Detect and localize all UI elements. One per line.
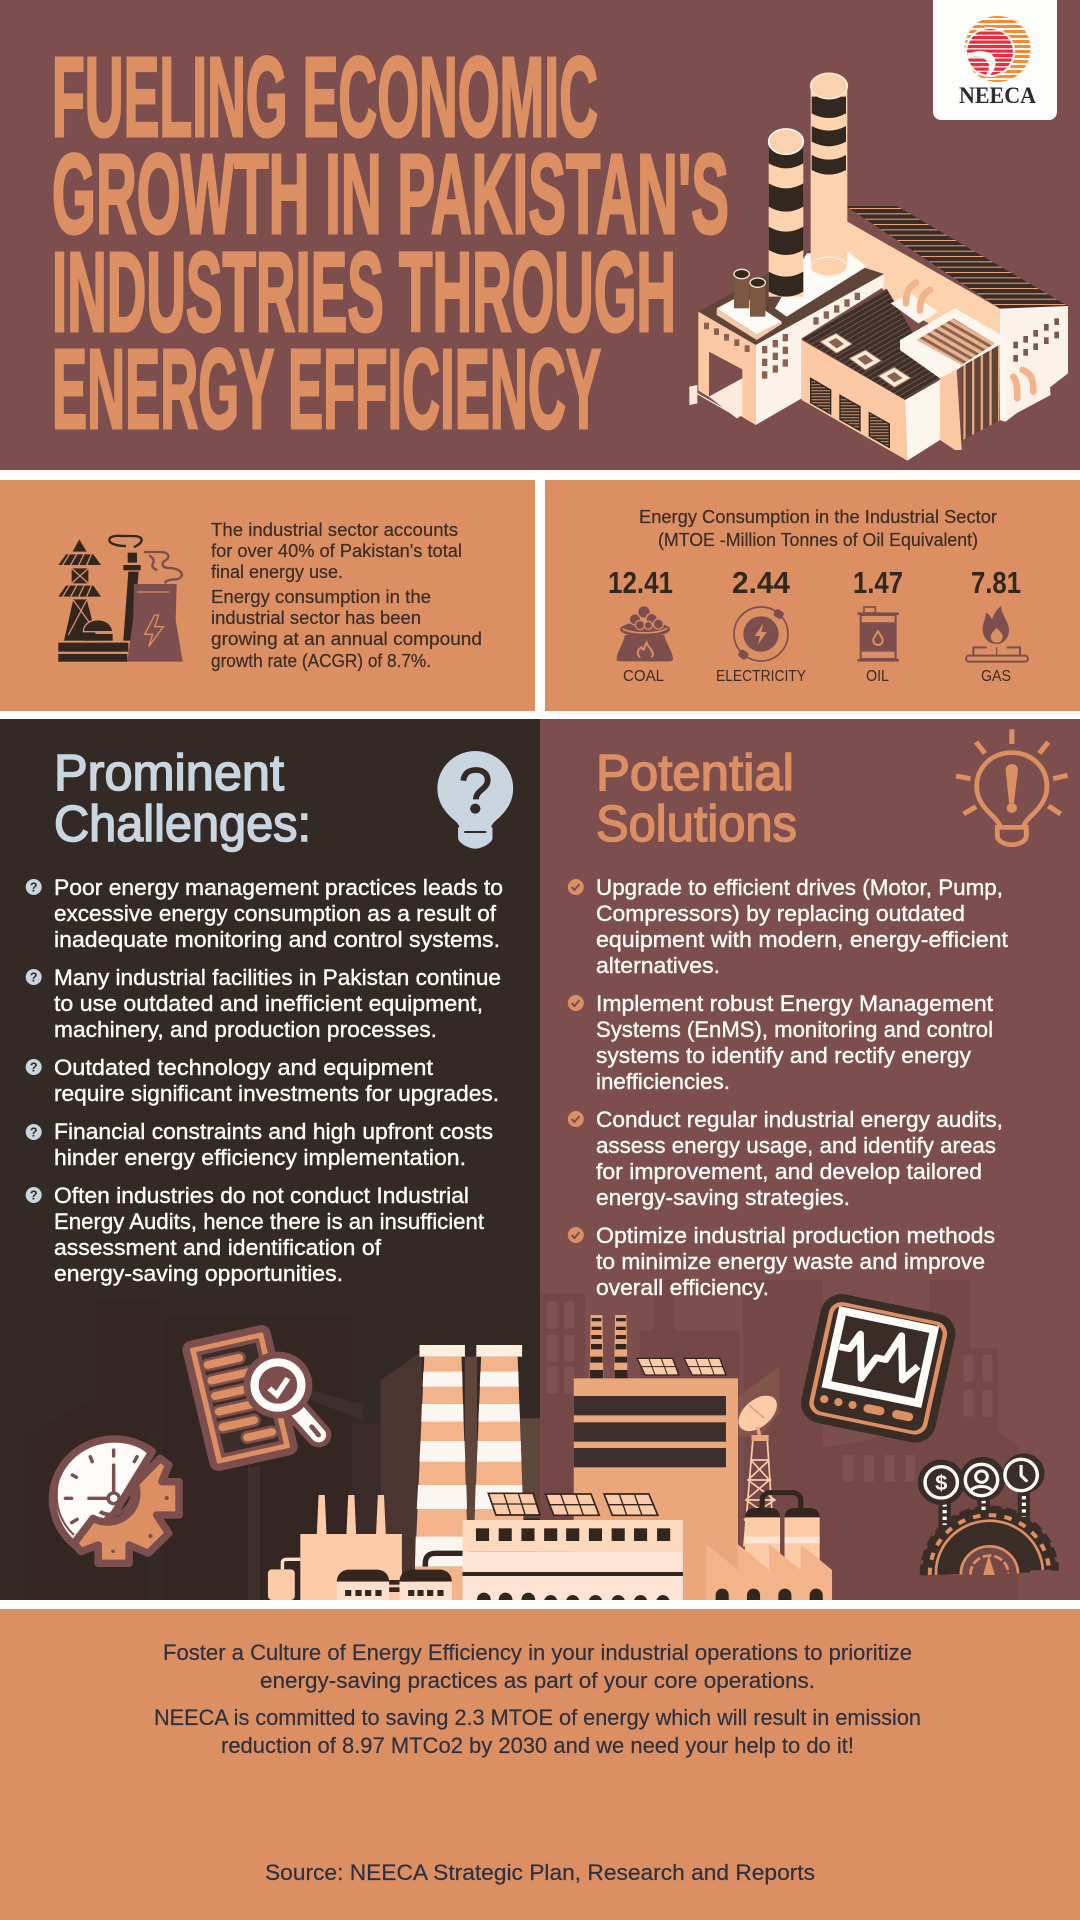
background silhouette: right city <box>540 1280 1019 1600</box>
text: call to action <box>154 1640 921 1758</box>
bullet group: question marks: ? <box>30 1060 38 1074</box>
heading: prominent challenges <box>54 744 311 852</box>
stat: oil <box>853 565 903 685</box>
list: challenges: excessive energy consumption as a result of <box>54 901 497 926</box>
icon: gauge gear with dials: $ <box>935 1470 947 1495</box>
list: challenges: machinery, and production processes. <box>54 1017 437 1042</box>
list: solutions: Implement robust Energy Management <box>596 991 993 1016</box>
stat: coal: 12.41 <box>608 565 673 600</box>
icon: power plant <box>58 536 183 662</box>
stat: oil: OIL <box>866 668 889 685</box>
icon: oil barrel <box>857 607 899 662</box>
list: solutions: overall efficiency. <box>596 1275 769 1300</box>
panel: prominent challenges <box>0 719 540 1600</box>
heading: potential solutions: Solutions <box>596 795 797 852</box>
icon: clock gear <box>52 1439 179 1563</box>
text: sector share: industrial sector has been <box>211 607 421 628</box>
list: solutions: alternatives. <box>596 953 720 978</box>
list: solutions: Upgrade to efficient drives (Motor, Pump, <box>596 875 1003 900</box>
list: challenges: require significant investments for upgrades. <box>54 1081 499 1106</box>
background silhouette: left city <box>24 1300 540 1600</box>
panel: industrial sector share <box>0 480 535 711</box>
list: challenges: to use outdated and inefficient equipment, <box>54 991 483 1016</box>
text: sector share: growing at an annual compound <box>211 628 482 649</box>
icon: gas flame <box>966 606 1028 662</box>
power building left part <box>463 1493 540 1600</box>
list: solutions: inefficiencies. <box>596 1069 730 1094</box>
illustration: isometric factory <box>689 73 1068 461</box>
list: solutions: Conduct regular industrial energy audits, <box>596 1107 1003 1132</box>
list: challenges: energy-saving opportunities. <box>54 1261 343 1286</box>
heading: energy consumption: Energy Consumption in the Industrial Sector <box>639 506 997 527</box>
heading: energy consumption: (MTOE -Million Tonnes of Oil Equivalent) <box>658 529 978 550</box>
icon: exclamation bulb <box>956 729 1068 845</box>
text: sector share <box>211 519 482 671</box>
icon: question bulb <box>437 751 513 849</box>
list: solutions: to minimize energy waste and improve <box>596 1249 985 1274</box>
bullet group: checks <box>568 879 584 1243</box>
icon: monitor <box>802 1295 954 1442</box>
twin storage tanks <box>745 1493 820 1600</box>
list: solutions <box>568 875 1008 1300</box>
list: challenges: Often industries do not conduct Industrial <box>54 1183 469 1208</box>
sawtooth factory <box>706 1544 832 1600</box>
list: solutions: Compressors) by replacing outdated <box>596 901 965 926</box>
text: sector share: Energy consumption in the <box>211 586 431 607</box>
heading: prominent challenges: Prominent <box>54 744 284 801</box>
panel: energy consumption <box>545 480 1080 711</box>
stat: gas: 7.81 <box>971 565 1021 600</box>
stat: coal <box>608 565 673 685</box>
list: challenges: Energy Audits, hence there is an insufficient <box>54 1209 484 1234</box>
illustration: industrial skyline right part <box>540 1315 832 1600</box>
list: solutions: Optimize industrial production methods <box>596 1223 995 1248</box>
satellite dish on lattice tower <box>732 1366 784 1547</box>
list: solutions: equipment with modern, energy-efficient <box>596 927 1008 952</box>
panel: potential solutions <box>540 719 1080 1600</box>
list: challenges: Poor energy management practices leads to <box>54 875 503 900</box>
bullet group: question marks: ? <box>30 880 38 894</box>
list: challenges: hinder energy efficiency implementation. <box>54 1145 466 1170</box>
icon: gauge gear with dials <box>918 1453 1055 1575</box>
icon: coal sack <box>617 606 673 661</box>
illustration: industrial skyline left part <box>268 1345 540 1600</box>
stat: electricity: 2.44 <box>732 565 791 600</box>
text: call to action: NEECA is committed to saving 2.3 MTOE of energy which will result in emission <box>154 1705 921 1730</box>
heading: prominent challenges: Challenges: <box>54 795 311 852</box>
list: solutions: energy-saving strategies. <box>596 1185 850 1210</box>
bullet group: question marks <box>26 879 42 1203</box>
heading: energy consumption <box>639 506 997 550</box>
list: solutions: systems to identify and rectify energy <box>596 1043 971 1068</box>
heading: potential solutions: Potential <box>596 744 794 801</box>
list: challenges <box>26 875 503 1286</box>
list: challenges: inadequate monitoring and control systems. <box>54 927 500 952</box>
list: challenges: assessment and identification of <box>54 1235 382 1260</box>
text: sector share: for over 40% of Pakistan's total <box>211 540 462 561</box>
bullet group: question marks: ? <box>30 970 38 984</box>
small refinery <box>268 1495 463 1600</box>
list: challenges: Financial constraints and high upfront costs <box>54 1119 493 1144</box>
bullet group: question marks: ? <box>30 1188 38 1202</box>
title <box>52 34 729 452</box>
icon: electricity <box>734 607 788 661</box>
panel: header <box>0 0 1080 470</box>
icon: audit document with magnifier <box>185 1328 319 1468</box>
text: call to action: energy-saving practices as part of your core operations. <box>260 1668 815 1693</box>
chimney pair <box>415 1345 523 1567</box>
stat: oil: 1.47 <box>853 565 903 600</box>
stat: coal: COAL <box>623 668 664 685</box>
list: solutions: for improvement, and develop tailored <box>596 1159 982 1184</box>
list: challenges: Many industrial facilities in Pakistan continue <box>54 965 501 990</box>
stat: gas <box>966 565 1028 685</box>
list: challenges: Outdated technology and equipment <box>54 1055 433 1080</box>
panel: call to action footer <box>0 1609 1080 1920</box>
bullet group: question marks: ? <box>30 1126 38 1140</box>
stat: electricity: ELECTRICITY <box>716 668 806 685</box>
logo: NEECA <box>933 0 1057 120</box>
stat: electricity <box>716 565 806 685</box>
stat: gas: GAS <box>981 668 1011 685</box>
list: solutions: Systems (EnMS), monitoring and control <box>596 1017 993 1042</box>
list: solutions: assess energy usage, and identify areas <box>596 1133 996 1158</box>
text: source: Source: NEECA Strategic Plan, Research and Reports <box>265 1860 815 1885</box>
logo: NEECA: NEECA <box>959 83 1036 108</box>
tower block <box>574 1315 738 1600</box>
text: call to action: Foster a Culture of Energy Efficiency in your industrial operations to prioritize <box>163 1640 912 1665</box>
text: sector share: growth rate (ACGR) of 8.7%. <box>211 650 431 671</box>
power building right part <box>540 1494 683 1600</box>
text: sector share: The industrial sector accounts <box>211 519 458 540</box>
heading: potential solutions <box>596 744 797 852</box>
text: call to action: reduction of 8.97 MTCo2 by 2030 and we need your help to do it! <box>221 1733 854 1758</box>
text: sector share: final energy use. <box>211 561 343 582</box>
